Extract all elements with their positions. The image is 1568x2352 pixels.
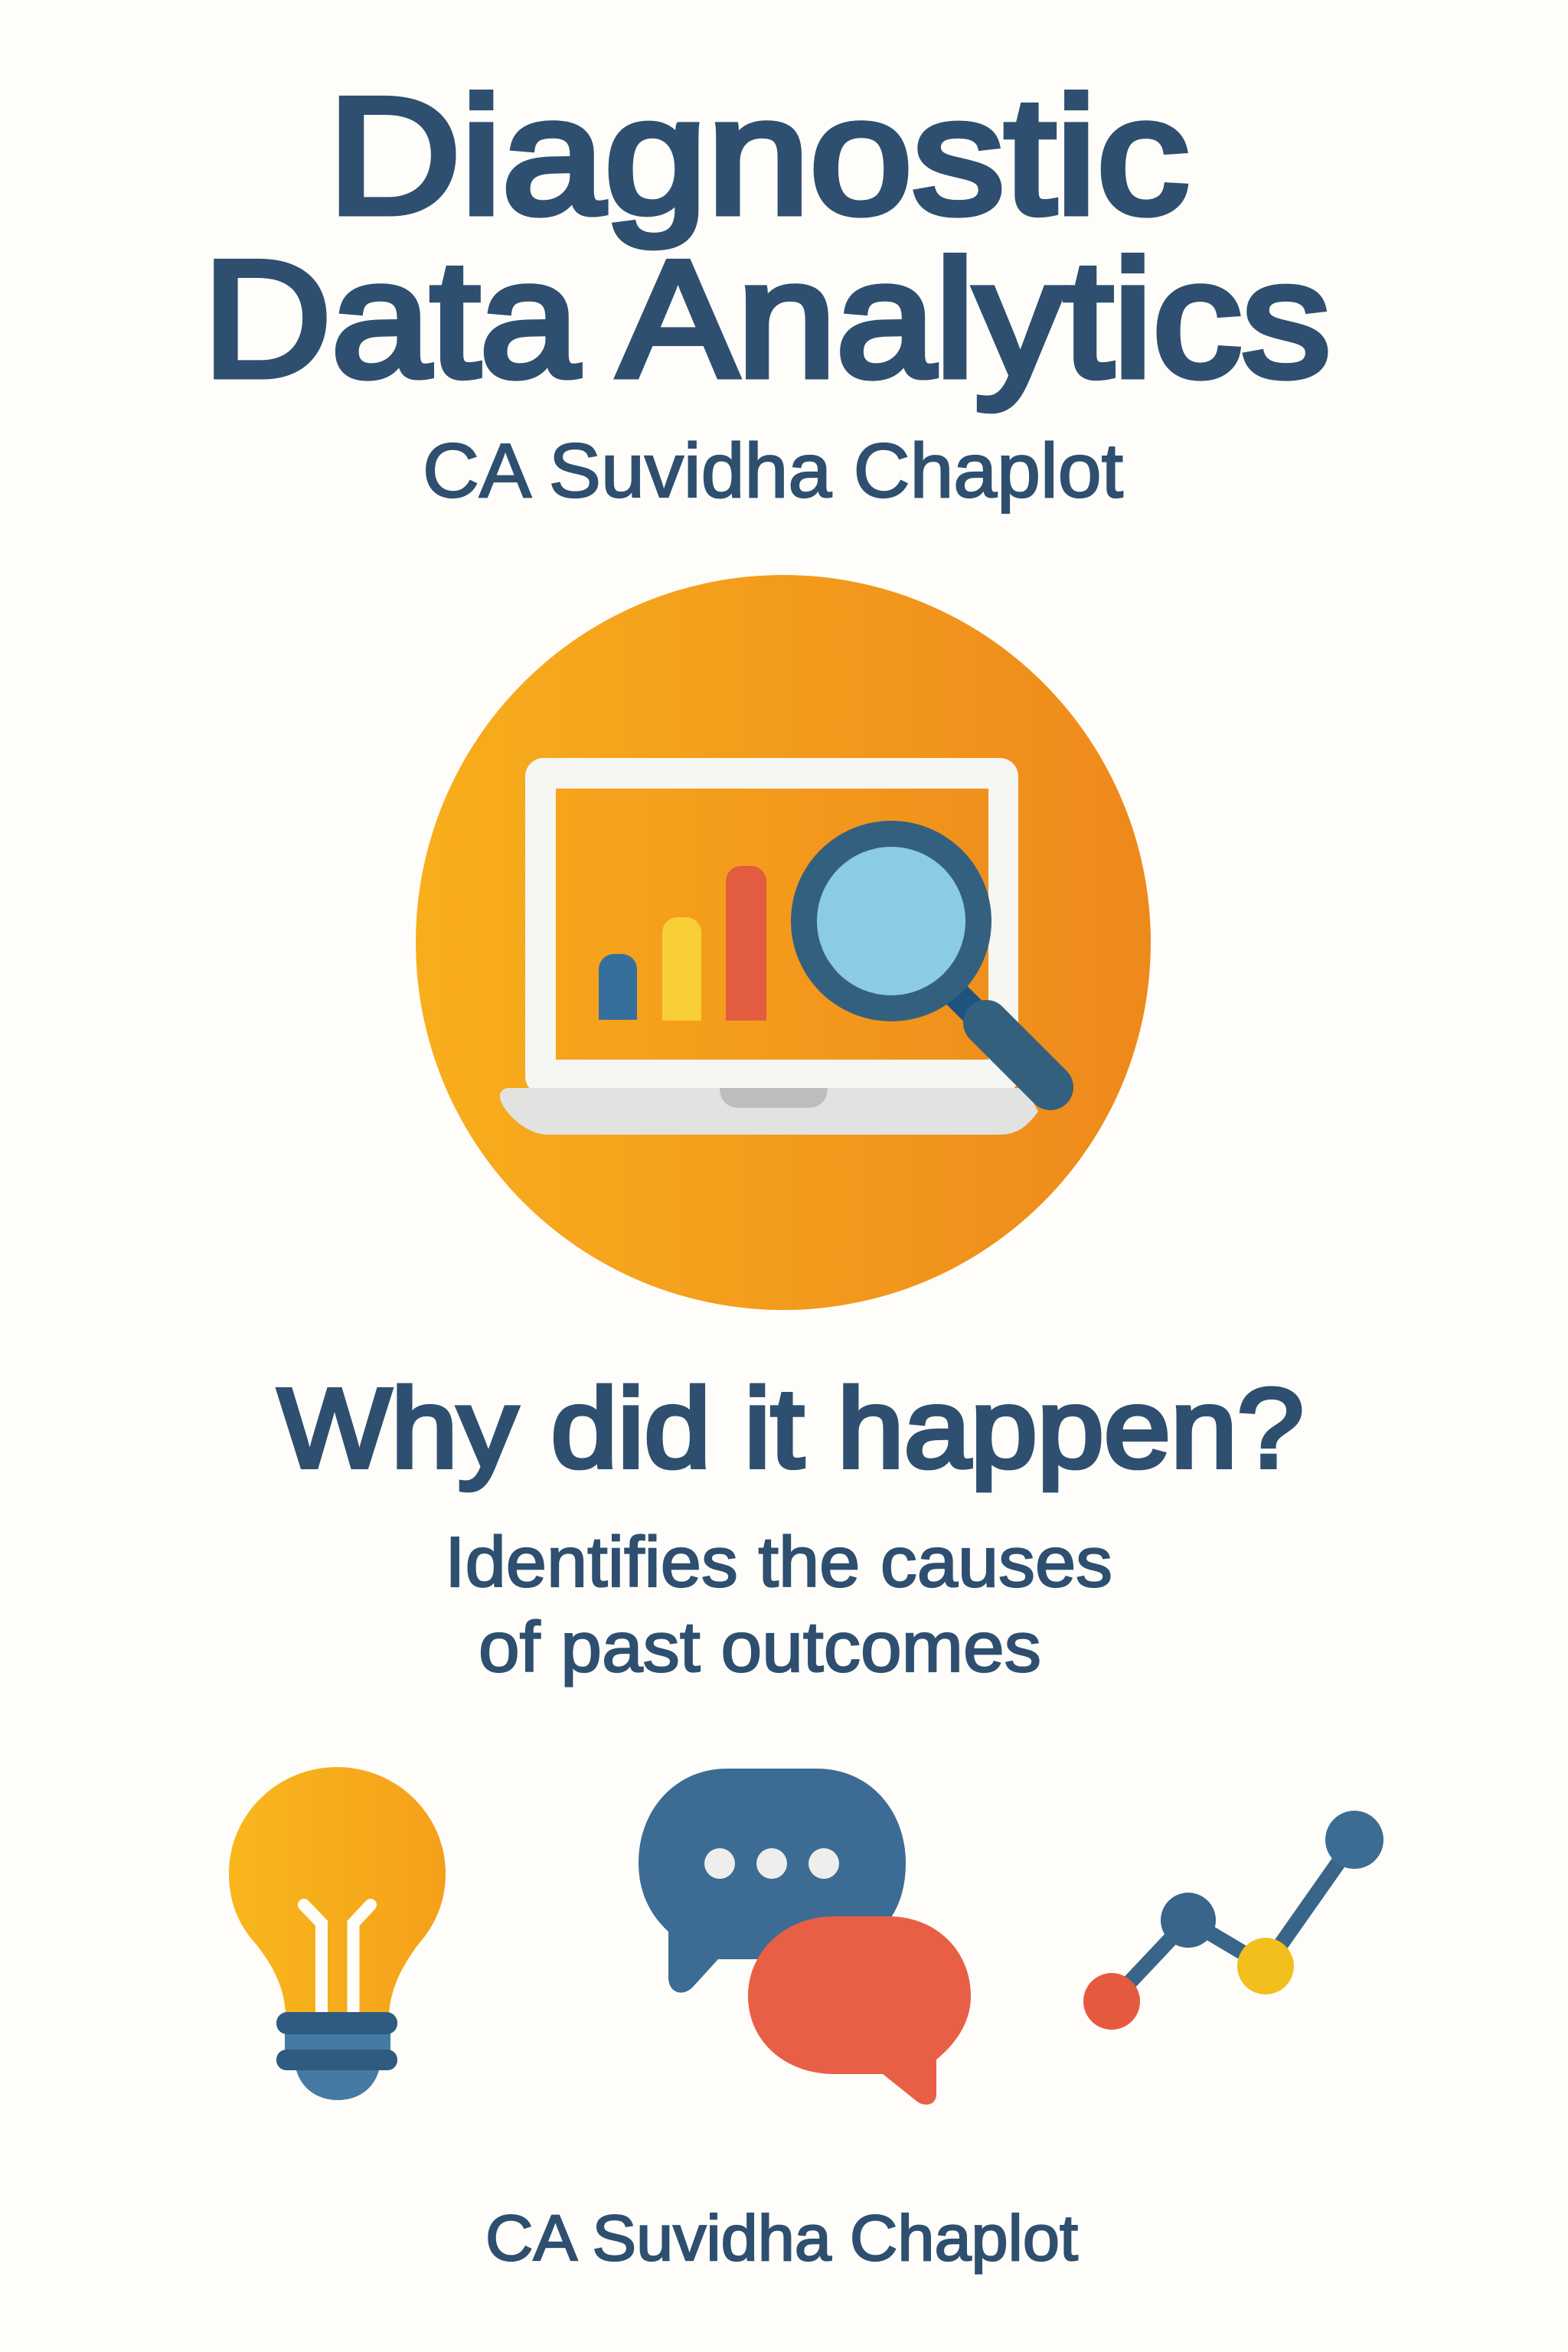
title: Diagnostic <box>328 63 1189 248</box>
description text: Identifies the causes <box>445 1522 1112 1602</box>
bulb base lower band <box>276 2050 397 2070</box>
author byline: CA Suvidha Chaplot <box>423 428 1123 514</box>
orange circle <box>416 575 1151 1310</box>
bulb base upper band <box>276 2012 397 2034</box>
description text: of past outcomes <box>479 1607 1041 1687</box>
magnifier handle <box>986 1023 1050 1087</box>
blue middle node <box>1161 1893 1216 1948</box>
laptop lid <box>525 758 1018 1095</box>
bulb glass <box>229 1767 446 2015</box>
yellow node <box>1237 1938 1294 1994</box>
bulb base neck <box>285 2029 390 2055</box>
bulb filament <box>304 1905 371 2011</box>
red speech bubble <box>748 1916 971 2105</box>
hero illustration: laptop and magnifier <box>416 575 1151 1310</box>
icon: light bulb <box>229 1767 446 2100</box>
laptop <box>500 758 1038 1135</box>
magnifier ring <box>791 821 991 1021</box>
bulb base tip <box>296 2067 380 2100</box>
icon: line chart <box>1083 1811 1383 2030</box>
magnifier neck <box>949 988 995 1034</box>
laptop notch <box>720 1088 828 1108</box>
laptop screen <box>556 789 988 1060</box>
red bar <box>726 866 766 1021</box>
chart connecting line <box>1112 1840 1354 2001</box>
red node <box>1083 1973 1140 2030</box>
yellow bar <box>662 917 701 1021</box>
blue speech bubble <box>639 1769 906 1993</box>
blue bar <box>599 954 637 1020</box>
blue top node <box>1325 1811 1383 1869</box>
magnifying glass <box>791 821 1050 1087</box>
title: Data Analytics <box>203 226 1331 411</box>
question heading: Why did it happen? <box>278 1366 1304 1491</box>
icon: speech bubbles <box>639 1769 971 2105</box>
bar chart on screen <box>599 866 766 1021</box>
magnifier lens <box>817 847 965 995</box>
footer author name: CA Suvidha Chaplot <box>485 2202 1078 2274</box>
laptop base <box>500 1088 1038 1135</box>
title <box>203 63 1331 411</box>
typing dots <box>704 1848 839 1879</box>
description text <box>445 1522 1112 1687</box>
